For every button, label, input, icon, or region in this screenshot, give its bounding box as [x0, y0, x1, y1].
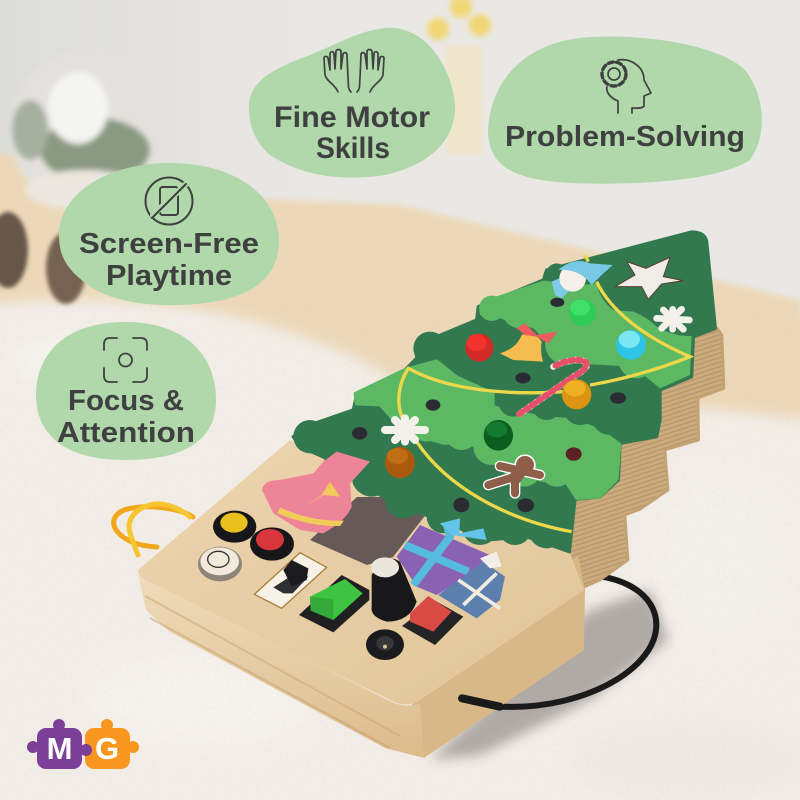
blob: focus	[36, 322, 216, 460]
controls and lower prints, traced in crop coordinates	[198, 511, 505, 707]
heading: screen free: Screen-Free	[79, 228, 259, 260]
dark green LED	[484, 420, 513, 451]
star cut-out	[615, 257, 683, 299]
shadow under board	[430, 590, 668, 760]
upper snowflake	[657, 309, 689, 329]
snowman	[552, 261, 613, 298]
heading line: attention: Attention	[57, 417, 195, 449]
board right face	[408, 555, 585, 758]
red square button	[402, 596, 463, 645]
red LED	[465, 334, 493, 362]
logo: purple piece	[27, 719, 92, 769]
heading: focus: Focus &	[68, 385, 184, 417]
bell and bow	[500, 323, 557, 362]
blurred fairy lights	[427, 0, 491, 155]
panel: problem solving	[488, 37, 762, 184]
candy cane	[519, 360, 587, 414]
logo letter M: M	[47, 731, 72, 766]
icon: crossed out phone	[146, 178, 192, 224]
busy board	[138, 232, 724, 758]
board stepped wooden side	[567, 328, 724, 593]
tree dark green base	[293, 232, 715, 552]
blurred pine cones	[0, 212, 86, 304]
icon: focus frame	[104, 338, 147, 382]
orange LED	[385, 447, 415, 478]
icon: head with gear	[602, 60, 651, 113]
blurred snow globe	[10, 48, 174, 212]
red push button	[250, 527, 294, 561]
board top face	[138, 440, 584, 705]
audio jack	[366, 629, 404, 660]
cable grommet	[462, 698, 500, 707]
blob: fine motor skills	[249, 28, 455, 178]
lower snowflake	[385, 418, 425, 442]
gingerbread man	[488, 454, 540, 493]
green LED top	[569, 299, 596, 326]
logo: MG puzzle pieces	[27, 719, 139, 769]
panel: fine motor skills	[249, 28, 455, 178]
yellow rope loop	[114, 504, 193, 555]
dark scallops between tiers	[468, 353, 657, 435]
black cable	[463, 575, 656, 707]
blob: screen free	[59, 163, 279, 305]
slide switch	[254, 553, 327, 608]
lower light green tier	[355, 361, 620, 499]
board front edge	[138, 574, 424, 758]
heading: fine motor skills: Fine Motor	[274, 101, 430, 134]
blob: problem solving	[488, 37, 762, 184]
small dark LEDs	[352, 298, 626, 512]
green rocker switch	[299, 575, 369, 632]
upper light green tier	[479, 281, 692, 388]
purple gift	[397, 518, 490, 595]
rotary knob	[371, 557, 417, 622]
metal key switch	[198, 547, 242, 581]
heading: problem solving: Problem-Solving	[505, 121, 745, 153]
printed tree, traced in crop coordinates	[262, 232, 715, 552]
garland strands	[399, 255, 690, 532]
blue dotted gift	[438, 552, 505, 618]
amber LED	[562, 379, 591, 409]
panel: screen free playtime	[59, 163, 279, 305]
logo letter G: G	[95, 731, 119, 766]
panel: focus and attention	[36, 322, 216, 460]
tree trunk print	[310, 497, 427, 565]
logo: orange piece	[85, 719, 139, 769]
yellow push button	[213, 511, 256, 543]
heading line: skills: Skills	[316, 132, 390, 165]
blue LED	[616, 330, 646, 360]
stocking and gift bag	[262, 452, 370, 533]
icon: raised hands	[324, 50, 384, 92]
heading line: playtime: Playtime	[106, 260, 232, 292]
